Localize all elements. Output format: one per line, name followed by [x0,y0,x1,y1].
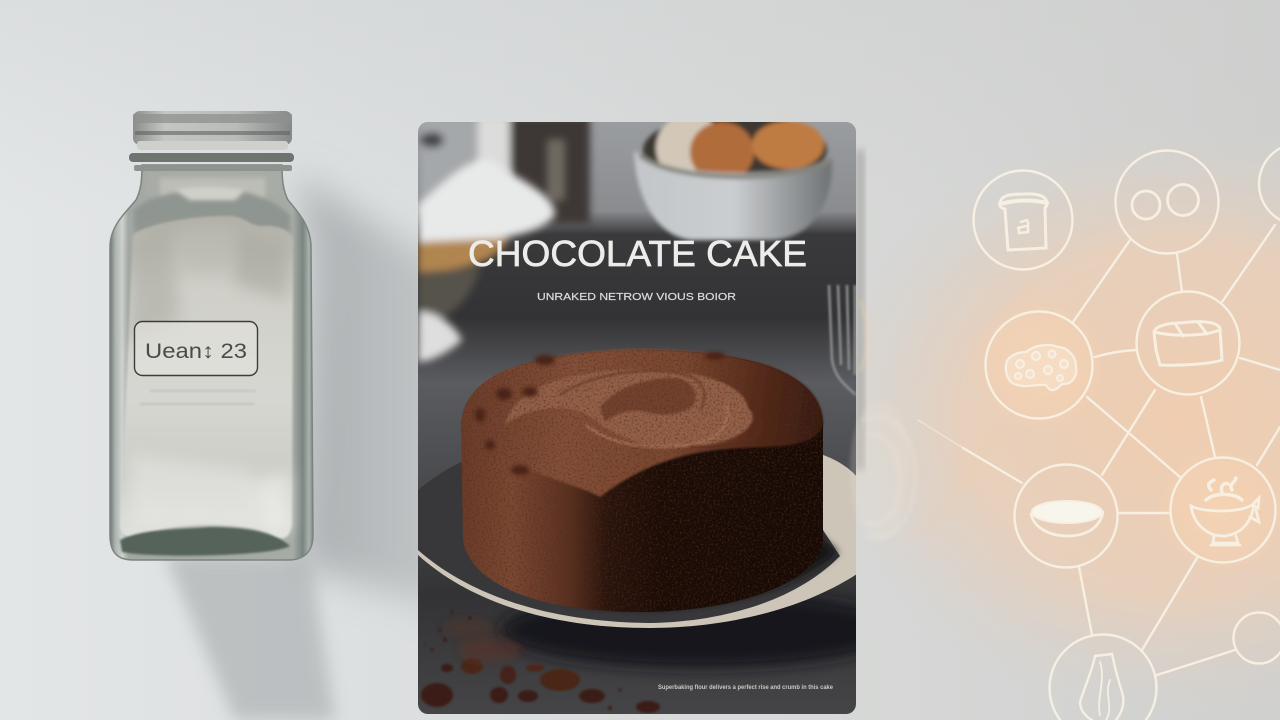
cake top [461,349,823,497]
connection network [918,143,1280,720]
cover title: CHOCOLATE CAKE [468,233,807,274]
node: vanilla icon [1050,634,1156,720]
cover subtitle: UNRAKED NETROW VIOUS BOIOR [537,291,736,303]
blurred kitchen backdrop [420,116,590,224]
jar label [134,322,258,376]
jar shadow [165,175,450,720]
frosting swirl [505,369,761,447]
node: empty small circle [1234,612,1280,664]
faint label lines [140,391,256,404]
cream rim [418,455,860,628]
dark plate surface [418,458,840,623]
node: eggs icon [1116,150,1218,254]
node: plate icon [1014,464,1118,568]
chocolate cake [455,345,830,620]
cake side [461,350,823,612]
cocoa lumps [475,352,725,475]
powder fill [120,216,293,538]
cover fine print: Superbaking flour delivers a perfect rise and crumb in this cake [658,684,833,691]
plate shadow [500,592,900,668]
recipe book cover [418,122,856,714]
cover background [418,122,856,714]
node: steaming bowl icon [1170,458,1276,562]
egg bowl [634,114,832,240]
spilled cocoa [421,610,660,713]
node: jar icon [974,170,1072,270]
jar glass body [110,165,313,560]
smoke wisp [850,300,929,545]
crumb grain [455,345,830,620]
warm glow background [820,125,1280,715]
plate [418,455,860,628]
jar label: Uean↕ 23 [145,340,247,363]
node: butter icon [1136,292,1240,394]
node: crumbs icon [986,312,1092,418]
node: partial circle [1259,143,1280,225]
fork [829,285,856,395]
glass neck [134,172,290,232]
recipe card shadow [856,150,864,470]
connector lines [918,225,1280,675]
flour bowl [418,159,555,362]
spice jar [110,111,313,560]
glass base [120,527,290,556]
metal lid [129,111,294,171]
